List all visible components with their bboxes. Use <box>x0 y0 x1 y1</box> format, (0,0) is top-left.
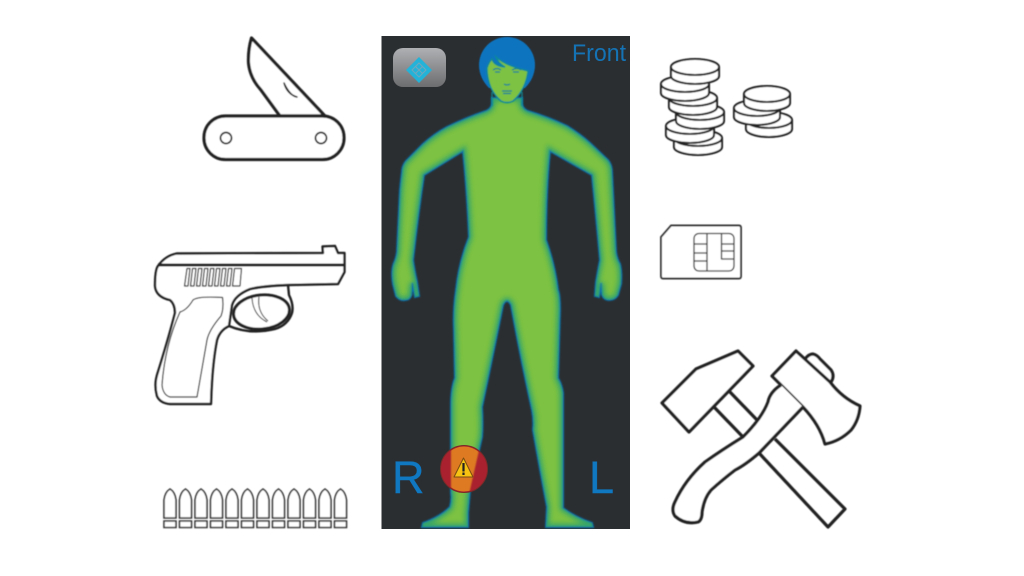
icon: crossed hammer and axe <box>662 351 860 527</box>
hammer <box>662 351 845 527</box>
menu button <box>393 48 446 87</box>
warning marker on right shin <box>440 445 488 493</box>
icon: pocket knife <box>204 38 344 160</box>
head with hair and face <box>479 37 535 106</box>
icon: row of bullets <box>164 489 346 528</box>
icon: pistol <box>155 246 344 404</box>
label: Front: Front <box>572 40 626 67</box>
label: L: L <box>589 452 614 503</box>
panel: body scanner screen <box>382 36 630 529</box>
icon: SIM card <box>661 226 741 278</box>
body silhouette <box>392 98 621 527</box>
icon: stacks of coins <box>661 59 792 155</box>
label: R: R <box>392 452 424 503</box>
axe <box>673 351 860 523</box>
